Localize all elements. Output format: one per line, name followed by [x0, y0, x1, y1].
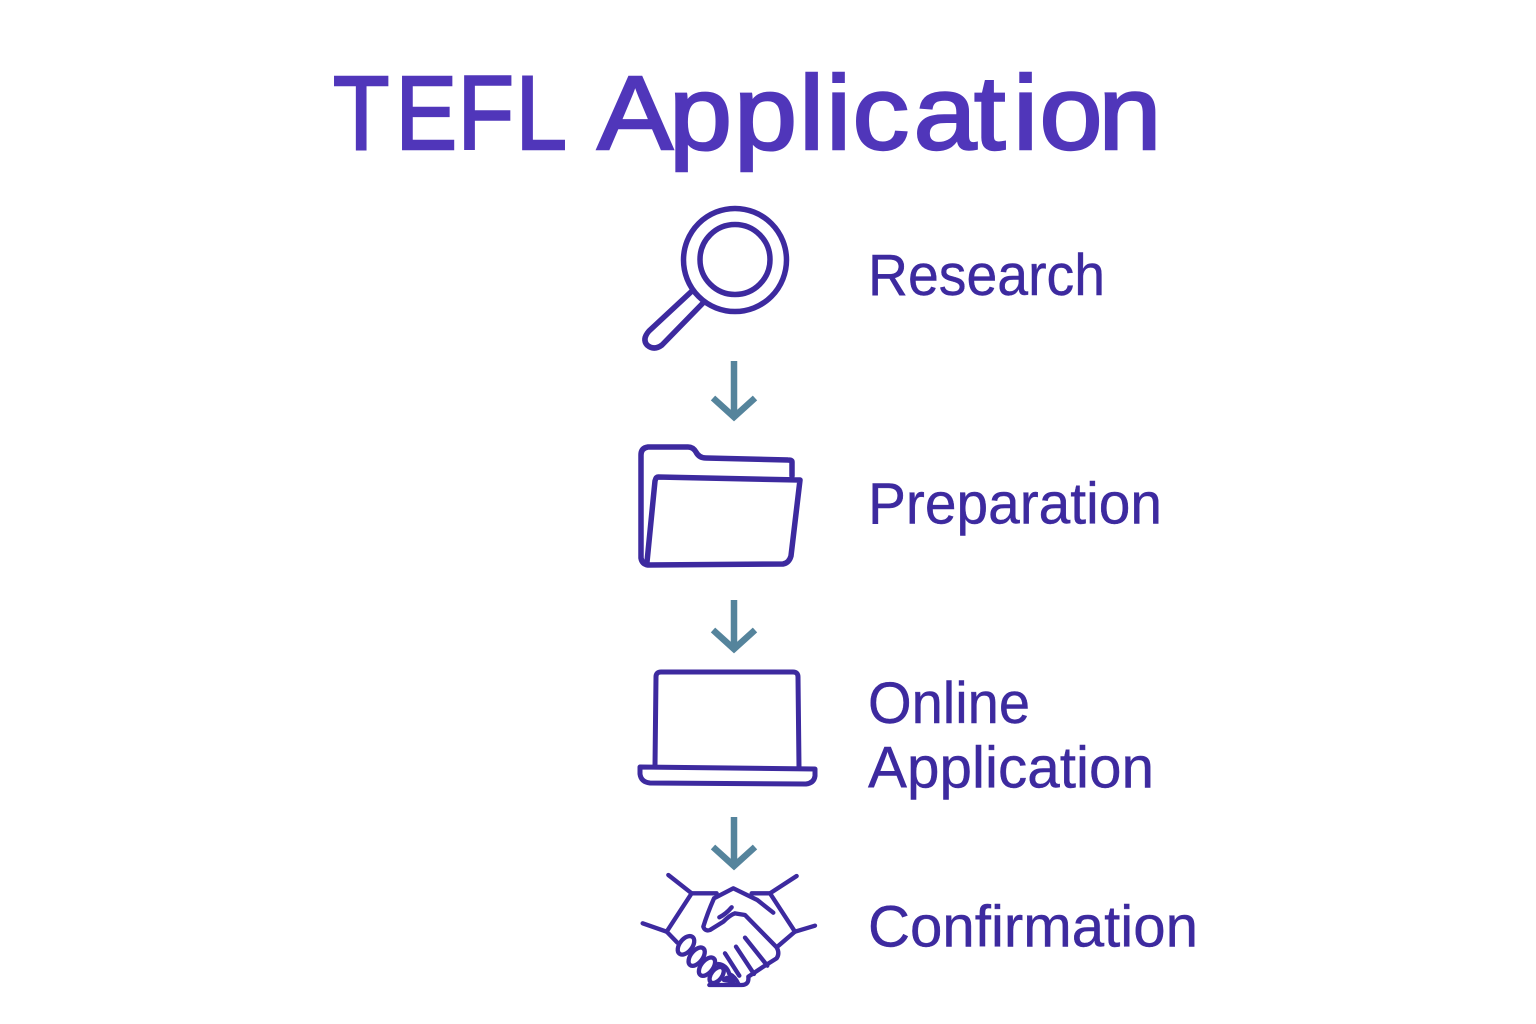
arrow 1: [713, 361, 755, 417]
label: confirmation: Confirmation: [868, 894, 1198, 960]
label: online application: Online: [868, 671, 1030, 736]
icon: folder: [641, 447, 800, 565]
title: [333, 53, 1161, 172]
title: TEFL: [333, 53, 567, 171]
step 2: preparation: [641, 447, 1162, 565]
label: research: Research: [868, 243, 1105, 308]
step 3: online application: [640, 671, 1154, 800]
step 1: research: [645, 208, 1105, 348]
icon: magnifying glass: [645, 208, 786, 348]
label: online application: [868, 671, 1154, 800]
label: online application: Application: [868, 736, 1154, 800]
arrow 3: [713, 817, 755, 866]
label: preparation: Preparation: [868, 472, 1162, 536]
icon: handshake: [643, 875, 815, 986]
step 4: confirmation: [643, 875, 1198, 986]
arrow 2: [713, 600, 755, 649]
icon: laptop: [640, 672, 815, 784]
title: Application: [597, 55, 1161, 172]
